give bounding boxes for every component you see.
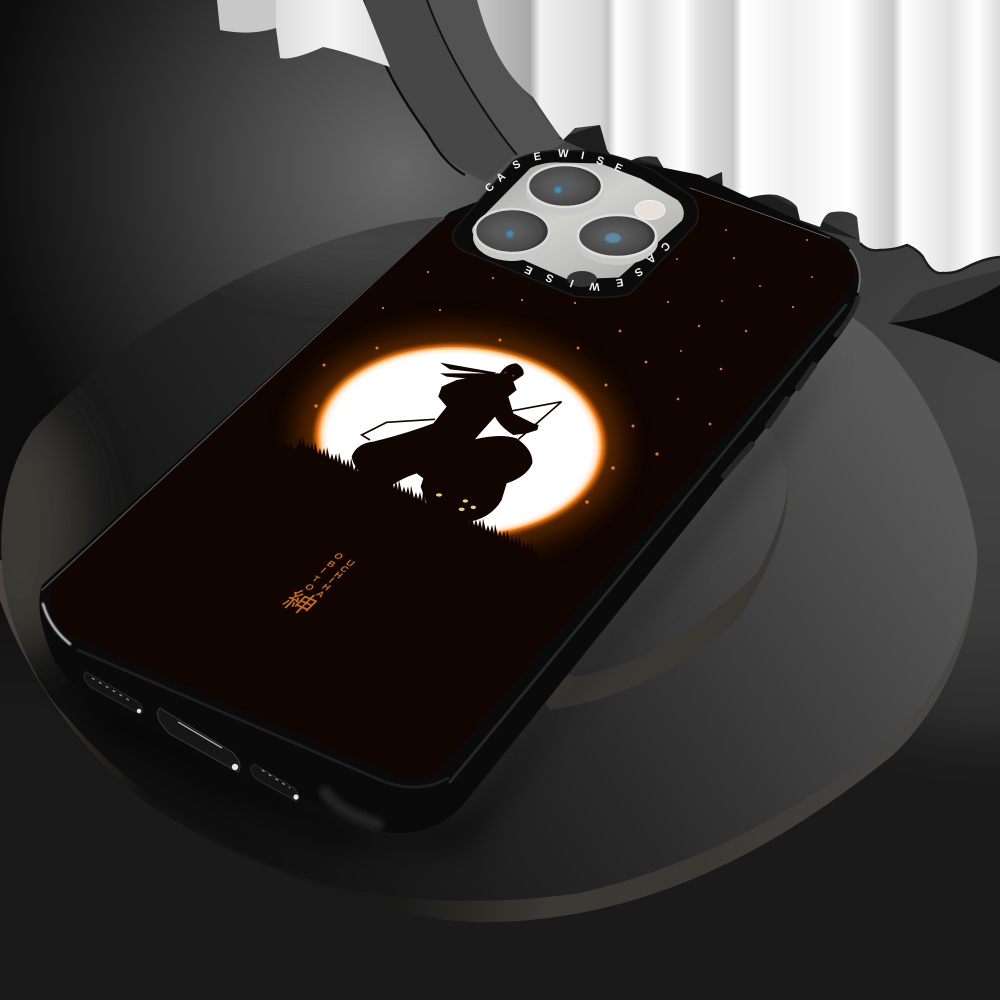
- grass: [284, 436, 538, 558]
- curtain: upper left: [217, 0, 390, 67]
- brand text: top: S: [511, 158, 523, 172]
- lens: top: [526, 165, 604, 215]
- brand text: top: W: [558, 148, 569, 160]
- brand text: bottom: W: [588, 280, 600, 292]
- brand text: bottom: I: [568, 277, 575, 289]
- phone shadow: [60, 348, 838, 850]
- sensor: [567, 271, 597, 287]
- brand text: bottom: C: [658, 239, 672, 253]
- vertical name text: O: [331, 551, 345, 562]
- vertical name text: I: [318, 566, 328, 575]
- brand text: bottom: S: [544, 271, 556, 285]
- platform: lower disk: [0, 200, 977, 922]
- moon glow: [293, 324, 627, 558]
- brand text: bottom: S: [632, 265, 645, 279]
- flash: [635, 200, 665, 220]
- brand text: bottom: E: [615, 275, 624, 289]
- phone: [39, 149, 861, 833]
- vertical name text: O: [302, 582, 316, 593]
- dark arc stand: [363, 0, 565, 185]
- phone case body: [39, 155, 861, 833]
- brand text: top: A: [494, 171, 508, 185]
- vertical name text: B: [324, 559, 338, 570]
- phone screen artwork: [50, 190, 854, 778]
- platform: upper disk: [520, 350, 787, 710]
- charging ports and speakers: [84, 672, 299, 801]
- brand text: bottom: [523, 239, 672, 292]
- brand text: top: C: [483, 181, 497, 195]
- ground: [288, 464, 484, 566]
- case highlights: [42, 188, 860, 824]
- vertical name text: I: [326, 576, 336, 585]
- lens: left: [473, 209, 551, 261]
- curtain: upper right: [477, 0, 1000, 273]
- camera bump: [456, 148, 695, 294]
- brand text: top: E: [612, 161, 624, 175]
- vertical name text: T: [309, 574, 322, 585]
- dark prop: right side: [888, 270, 1000, 363]
- brand text: top: [483, 148, 624, 195]
- brand text: top: S: [595, 154, 606, 168]
- vertical name text: [306, 553, 356, 598]
- camera window: [475, 165, 681, 277]
- brand text: bottom: E: [523, 263, 535, 277]
- brand text: bottom: A: [644, 251, 658, 265]
- vertical name text: A: [313, 589, 327, 600]
- silhouette: cellist: [352, 363, 562, 523]
- vertical name text: H: [331, 570, 345, 581]
- moon: [318, 347, 602, 533]
- vertical name text: C: [337, 564, 351, 575]
- vertical name text: H: [319, 582, 333, 593]
- lens: right: [576, 215, 658, 265]
- side buttons: [724, 365, 814, 476]
- vertical name text: U: [343, 558, 357, 569]
- kanji mark: 紳: [277, 586, 324, 619]
- brand text: top: I: [580, 150, 585, 162]
- brand text: top: E: [533, 150, 542, 164]
- stars: [314, 229, 813, 504]
